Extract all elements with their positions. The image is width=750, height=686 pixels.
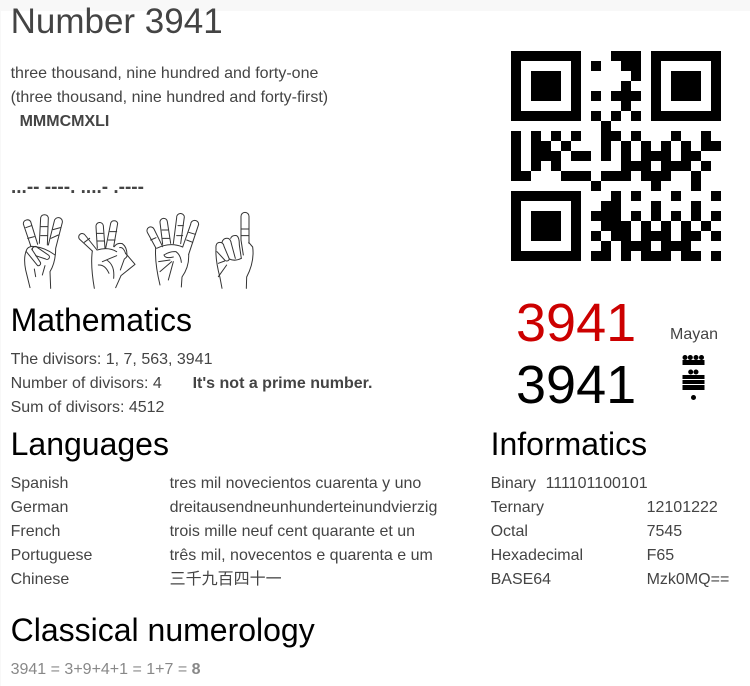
- heading: languages: Languages: [11, 426, 169, 462]
- hand: three: [23, 215, 62, 288]
- text: roman numeral: MMMCMXLI: [20, 113, 109, 130]
- table: informatics: [491, 475, 729, 588]
- text: divisors: The divisors: 1, 7, 563, 3941 Number of divisors: 4 Sum of divisors: 4512: [11, 351, 212, 416]
- table: languages: [11, 475, 437, 588]
- text: numerology sum: 3941 = 3+9+4+1 = 1+7 = 8: [11, 661, 201, 678]
- number: black 3941: 3941: [516, 355, 636, 415]
- table: languages: tres mil novecientos cuarenta y uno dreitausendneunhunderteinundvierzig trois mille neuf cent quarante et un três mil, novecentos e quarenta e um 三千九百四十一: [170, 475, 437, 588]
- text: divisors: It's not a prime number.: [193, 375, 372, 392]
- label: mayan: Mayan: [670, 326, 718, 343]
- title: Number 3941: [11, 2, 223, 41]
- table: informatics: 12101222 7545 F65 Mzk0MQ==: [647, 499, 729, 588]
- text: number in words: three thousand, nine hundred and forty-one (three thousand, nine hundred and forty-first): [11, 65, 328, 106]
- table: informatics: 111101100101: [546, 475, 648, 492]
- heading: classical numerology: Classical numerology: [11, 612, 315, 648]
- table: informatics: Binary Ternary Octal Hexadecimal BASE64: [491, 475, 583, 588]
- number: red 3941: 3941: [516, 293, 636, 353]
- hand: four fingers: [147, 213, 199, 287]
- heading: informatics: Informatics: [491, 426, 647, 462]
- qr code: [511, 51, 721, 261]
- heading: mathematics: Mathematics: [11, 302, 192, 338]
- text: divisors: [11, 351, 372, 416]
- hand: four (thumb over pinky): [79, 221, 135, 288]
- icon: sign language hands: [22, 212, 254, 289]
- text: morse code: ...-- ----. ....- .----: [11, 177, 144, 198]
- icon: mayan numeral: [682, 355, 704, 400]
- hand: one: [216, 212, 253, 288]
- table: languages: Spanish German French Portuguese Chinese: [11, 475, 92, 588]
